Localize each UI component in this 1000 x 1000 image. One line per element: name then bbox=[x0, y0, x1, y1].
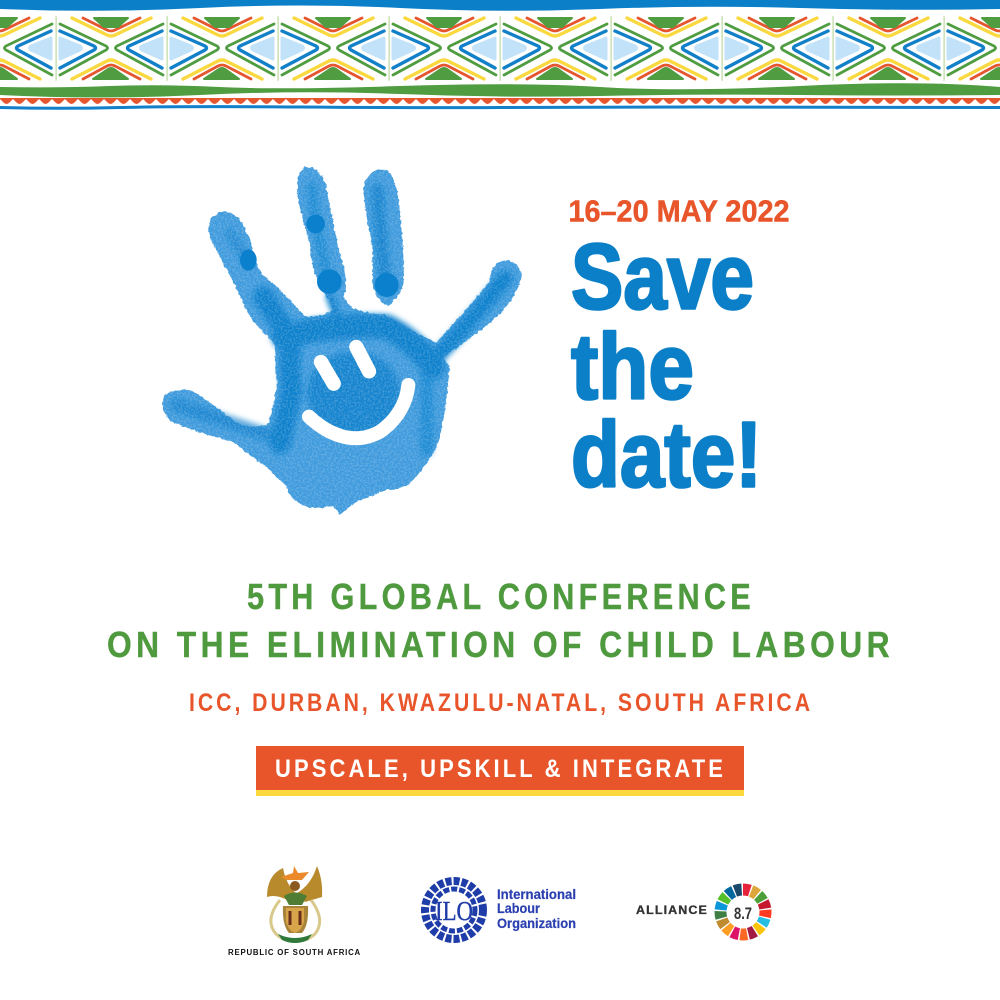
ILO name bbox=[497, 887, 576, 931]
dark finger-pad spots bbox=[240, 215, 399, 297]
conference title: ON THE ELIMINATION OF CHILD LABOUR bbox=[107, 624, 894, 665]
venue: ICC, DURBAN, KWAZULU-NATAL, SOUTH AFRICA bbox=[189, 689, 813, 717]
logo: Alliance 8.7 SDG wheel bbox=[711, 880, 775, 944]
ILO name: International bbox=[497, 887, 576, 902]
heading: Save the date! bbox=[571, 225, 762, 507]
logo: Alliance 8.7 SDG wheel: 8.7 bbox=[734, 904, 752, 923]
logo: ILO emblem bbox=[425, 881, 483, 939]
smiley eyes and mouth bbox=[309, 347, 408, 438]
heading: Save the date!: the bbox=[571, 315, 694, 419]
conference title bbox=[107, 576, 894, 665]
conference title: 5TH GLOBAL CONFERENCE bbox=[247, 576, 755, 617]
mottled paint texture bbox=[163, 167, 522, 515]
ILO name: Organization bbox=[497, 916, 576, 931]
logo: ILO emblem: ILO bbox=[435, 896, 473, 926]
logo caption: REPUBLIC OF SOUTH AFRICA bbox=[228, 948, 361, 957]
heading: Save the date!: date! bbox=[571, 403, 762, 507]
slogan banner bbox=[256, 746, 744, 796]
date: 16–20 MAY 2022 bbox=[568, 194, 790, 228]
decorative top border bbox=[0, 0, 1000, 108]
logo: South African coat of arms bbox=[267, 866, 322, 943]
ILO name: Labour bbox=[497, 901, 541, 916]
palm darker paint bbox=[177, 187, 505, 450]
slogan banner: UPSCALE, UPSKILL & INTEGRATE bbox=[275, 755, 726, 783]
icon: blue handprint with smiley bbox=[163, 167, 522, 515]
heading: Save the date!: Save bbox=[571, 225, 754, 329]
Alliance label: ALLIANCE bbox=[636, 905, 708, 917]
